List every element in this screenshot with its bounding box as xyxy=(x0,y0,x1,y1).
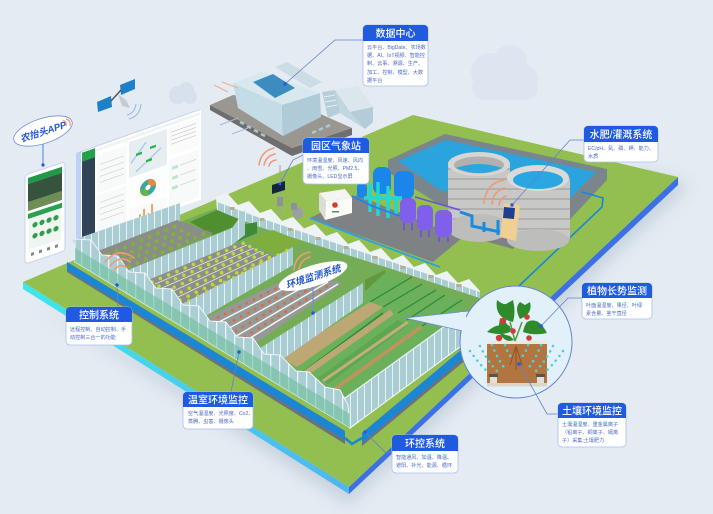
wall A-B xyxy=(123,228,232,290)
side wall xyxy=(345,313,463,428)
pipe line right xyxy=(505,192,603,300)
platform base xyxy=(23,115,690,505)
environment monitoring callout: 环境监测系统 xyxy=(284,262,344,291)
label: irrigation: 水肥/灌溉系统 xyxy=(590,128,652,141)
label: climate control xyxy=(392,435,458,473)
blue pipes xyxy=(460,212,500,235)
label: data center: 云平台、BigDate、农场数 xyxy=(367,44,426,51)
label: irrigation: EC/pH、氮、磷、钾、能力、 xyxy=(588,145,654,152)
wifi icon: greenhouse A xyxy=(105,253,134,270)
label: plant growth: 叶面温湿度、果径、叶绿 xyxy=(586,302,642,309)
blue pump tanks xyxy=(352,167,414,218)
app callout xyxy=(10,110,76,167)
zoom circle xyxy=(405,286,572,398)
label: soil: （铅离子、铜离子、镉离 xyxy=(562,429,618,436)
label: soil: 土壤环境监控 xyxy=(562,404,622,418)
label: soil: 土壤温湿度、重金属离子 xyxy=(562,421,618,428)
soil box xyxy=(487,341,547,386)
label: plant growth: 素含量、茎干直径 xyxy=(586,310,627,317)
label: weather station: 环境温湿度、风速、风向 xyxy=(307,157,363,164)
label: greenhouse monitoring xyxy=(183,392,253,429)
app callout: 农抬头APP xyxy=(19,119,69,145)
label: weather station: 摄像头、LED显示屏 xyxy=(307,173,353,180)
label: weather station: 园区气象站 xyxy=(311,140,361,152)
section B seedlings xyxy=(148,242,277,305)
label: data center: 加工、控制、模型、大数 xyxy=(367,69,423,76)
equipment pad xyxy=(310,195,522,262)
label: data center xyxy=(363,25,428,86)
back wall beige vents xyxy=(232,207,459,287)
section D crop beds xyxy=(277,273,463,398)
greenhouse floor xyxy=(75,208,480,428)
label: data center: 据、AI、IoT视频、智能控 xyxy=(367,52,425,59)
connector: data center xyxy=(283,40,363,86)
label: control system: 远程控制、自动控制、手 xyxy=(70,326,126,333)
cloud: top right xyxy=(471,45,538,100)
moat right xyxy=(345,345,467,446)
environment monitoring callout xyxy=(276,255,350,315)
cloud: small xyxy=(169,82,197,104)
green patches xyxy=(190,210,385,293)
satellite xyxy=(97,79,141,119)
label: data center: 数据中心 xyxy=(376,27,416,40)
label: climate control: 遮阳、补光、能源、循环 xyxy=(396,462,452,469)
berries xyxy=(496,314,532,341)
irrigation pool xyxy=(388,134,607,230)
front wall green tint xyxy=(75,248,350,428)
label: climate control: 环控系统 xyxy=(405,437,445,450)
connector: control system xyxy=(115,283,119,307)
purple tanks xyxy=(400,197,460,242)
front wall with gables xyxy=(75,239,350,428)
label: control system: 控制系统 xyxy=(79,308,119,322)
back wall with gables xyxy=(216,193,480,298)
greenhouse xyxy=(73,193,480,428)
label: data center: 据平台 xyxy=(367,77,382,84)
connector: climate control xyxy=(363,430,392,452)
data center xyxy=(210,62,373,156)
phone app screen xyxy=(25,162,65,264)
label: weather station xyxy=(303,138,369,184)
wifi icon: tanks xyxy=(484,180,506,205)
white fertilizer box xyxy=(319,189,352,220)
weather station xyxy=(272,165,304,218)
moat left xyxy=(67,262,345,444)
label: data center: 制、云事、溯源、生产、 xyxy=(367,60,423,67)
label: control system xyxy=(66,307,132,345)
control cabinet xyxy=(500,203,520,241)
dashboard screen xyxy=(76,109,201,244)
label: climate control: 智能通风、加温、降温、 xyxy=(396,454,452,461)
plant xyxy=(487,300,547,341)
connector: soil xyxy=(517,362,558,414)
wifi icon: greenhouse C xyxy=(294,252,310,270)
label: control system: 动控制三合一的功能 xyxy=(70,334,116,341)
connector: greenhouse monitoring xyxy=(231,350,241,392)
data lines xyxy=(214,82,248,134)
back wall glass lower part xyxy=(217,202,480,298)
wall C-D xyxy=(257,283,363,375)
wall B-C xyxy=(180,247,293,328)
label: irrigation xyxy=(584,126,658,162)
label: irrigation: 水质 xyxy=(588,153,598,160)
connector: plant growth xyxy=(539,298,582,328)
label: greenhouse monitoring: 空气温湿度、光照度、Co2、 xyxy=(188,410,253,417)
back wall blue trim xyxy=(310,218,440,267)
water droplets xyxy=(470,345,563,372)
label: plant growth: 植物长势监测 xyxy=(587,284,647,298)
water tanks xyxy=(448,152,570,251)
back wall left xyxy=(73,203,180,258)
label: greenhouse monitoring: 温室环境监控 xyxy=(188,394,248,406)
label: plant growth xyxy=(582,283,652,319)
connector: irrigation xyxy=(510,140,584,207)
label: greenhouse monitoring: 蒸腾、虫害、摄像头 xyxy=(188,418,234,425)
label: soil xyxy=(558,403,626,447)
section A seedlings xyxy=(93,220,213,272)
wifi icon: weather station xyxy=(259,148,276,166)
connector: weather station xyxy=(278,155,303,186)
label: soil: 子）采集;土壤肥力 xyxy=(562,437,604,444)
section C red plants xyxy=(207,273,343,347)
wall top right corner xyxy=(232,210,245,245)
label: weather station: 、雨雪、光照、PM2.5、 xyxy=(307,165,362,172)
